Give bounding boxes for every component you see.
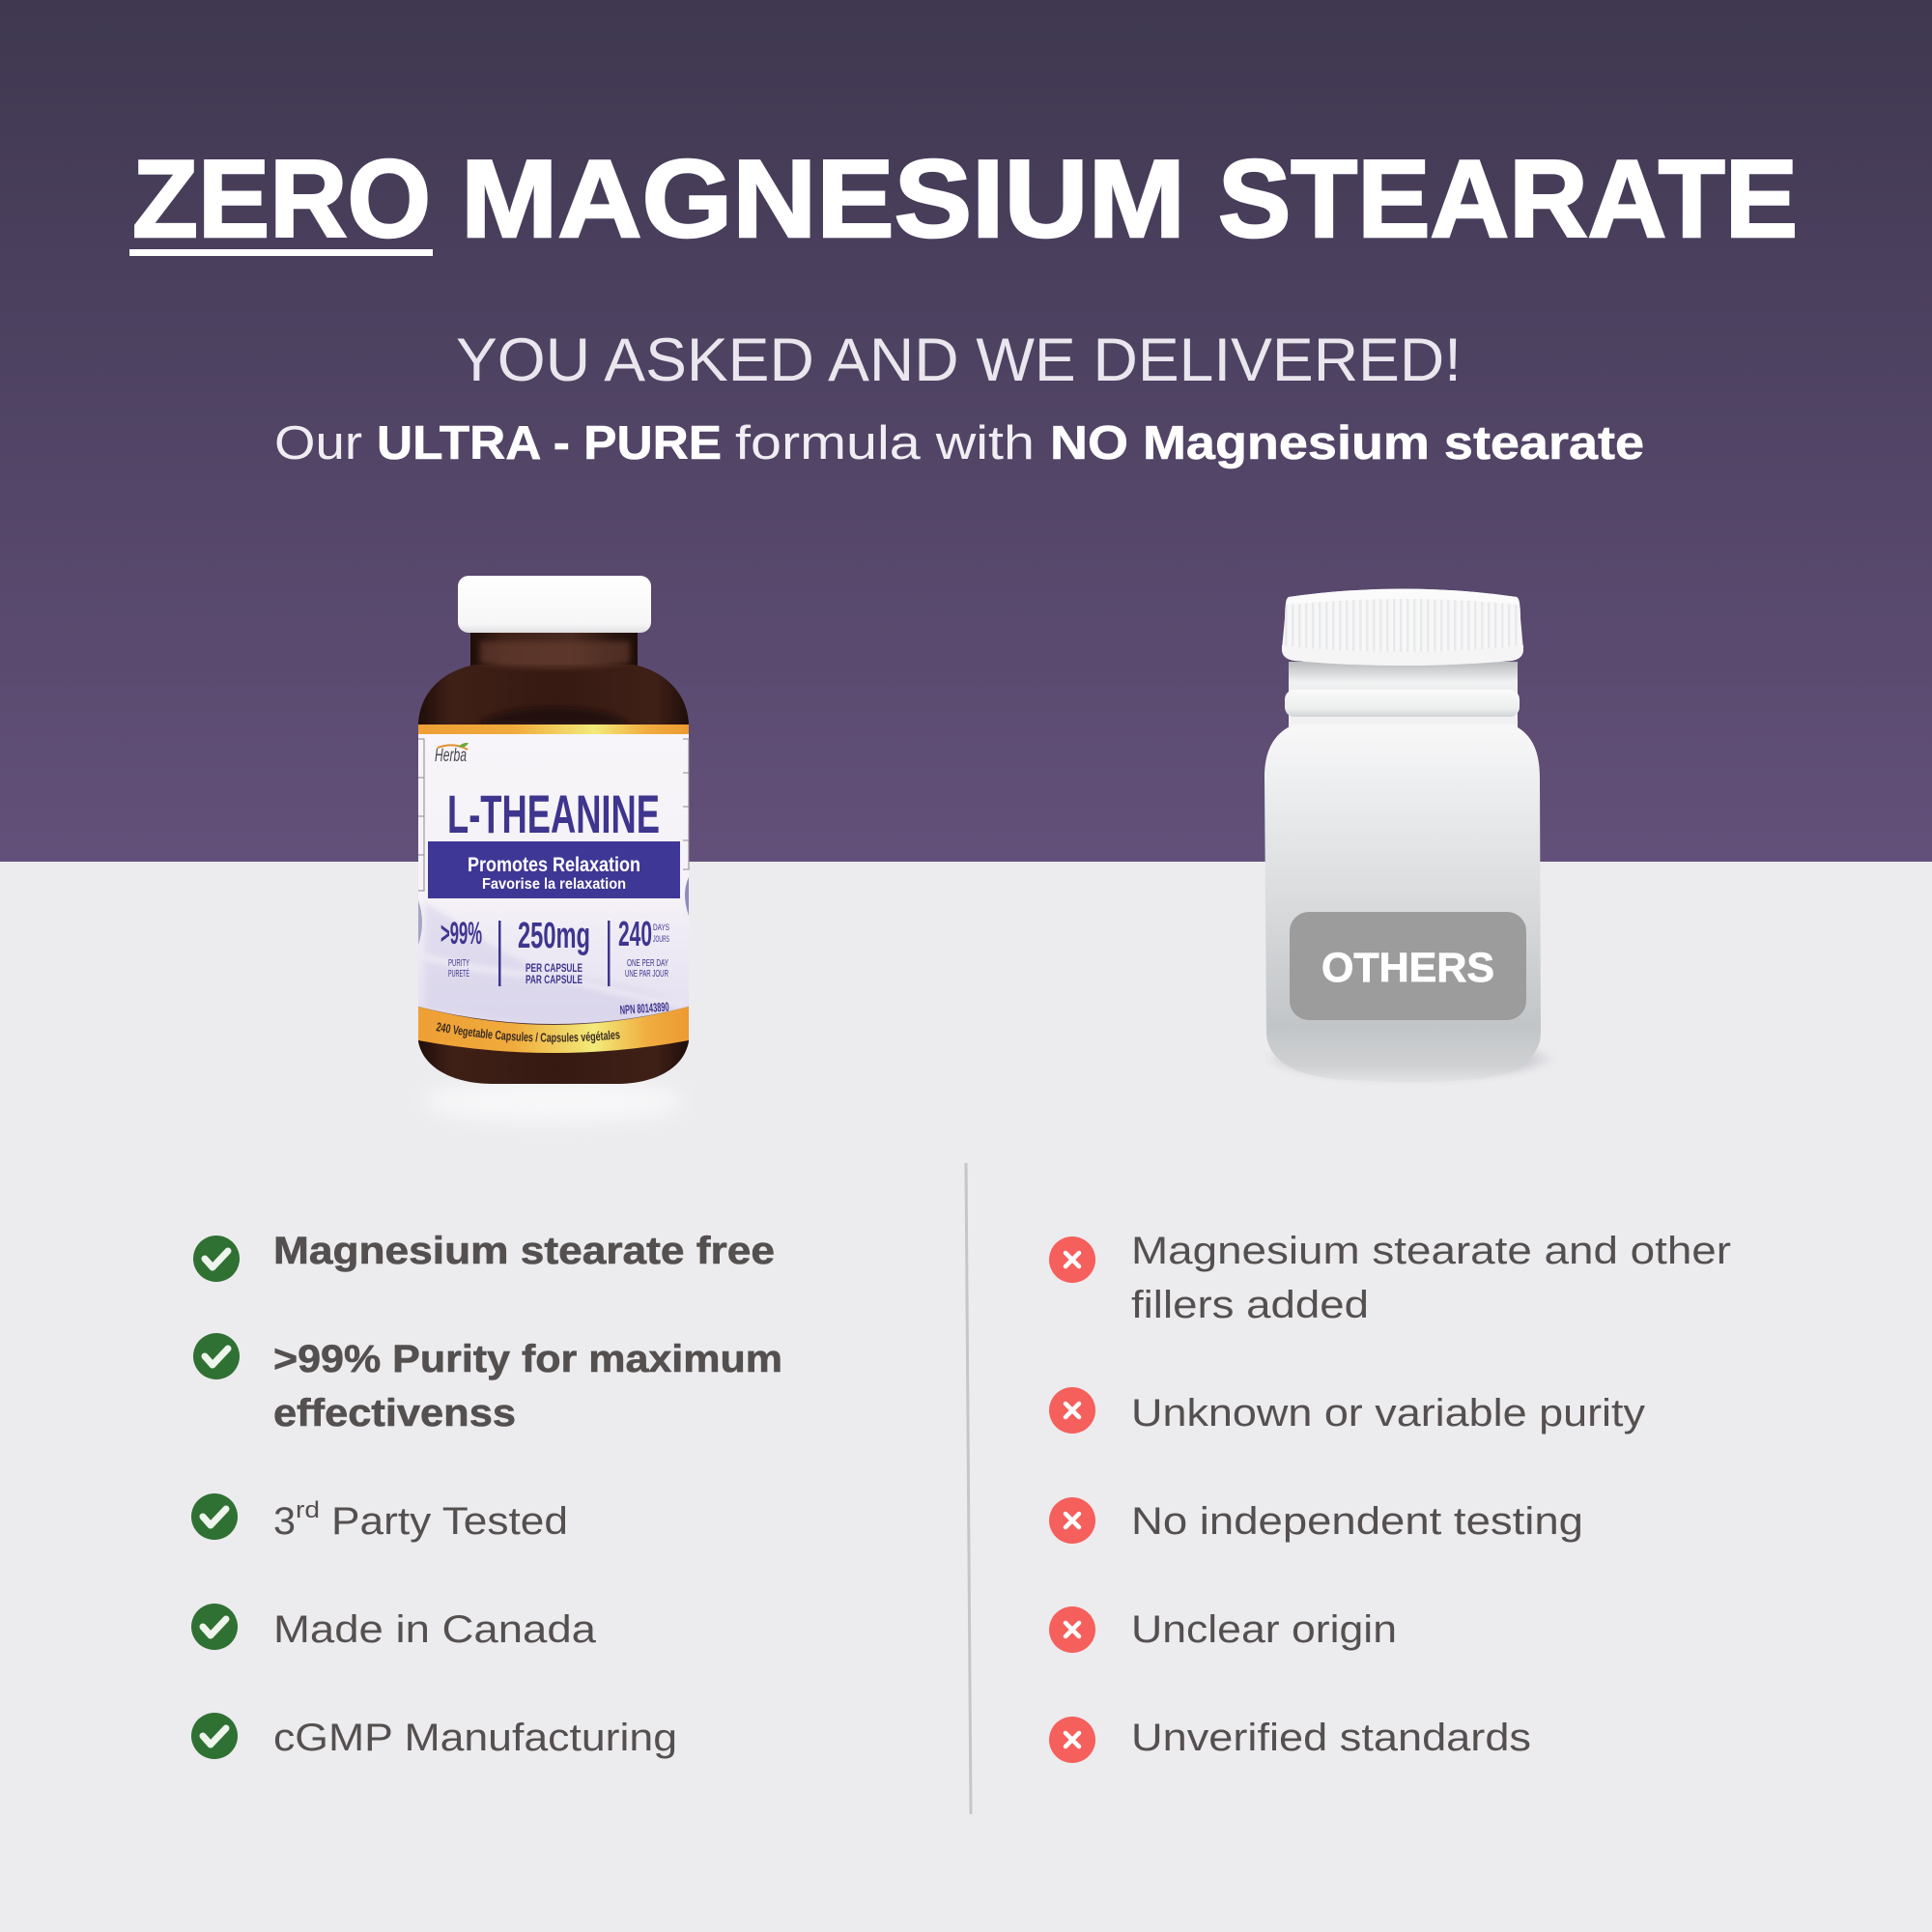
item: unknown purity: Unknown or variable purity — [1131, 1392, 1645, 1435]
bottle neck — [470, 626, 638, 674]
label gold bands — [418, 724, 689, 734]
cap — [458, 576, 651, 633]
tagline: Our — [274, 417, 362, 469]
stats: 240 — [618, 914, 652, 953]
bottle glass body — [418, 665, 689, 1084]
stats: JOURS — [653, 934, 669, 944]
stats: >99% — [440, 916, 482, 951]
item: made in Canada: Made in Canada — [273, 1608, 597, 1651]
label — [418, 724, 690, 1053]
item: unverified standards: Unverified standards — [1131, 1717, 1531, 1759]
claim banner: Promotes Relaxation — [468, 854, 640, 876]
item: no independent testing: No independent testing — [1131, 1500, 1583, 1543]
item: unclear origin — [1049, 1606, 1397, 1653]
OTHERS badge: OTHERS — [1321, 945, 1494, 991]
stats: UNE PAR JOUR — [625, 968, 668, 980]
item: fillers added — [1049, 1230, 1731, 1326]
product name: L-THEANINE — [447, 783, 660, 844]
item: magnesium stearate free: Magnesium stearate free — [273, 1230, 775, 1272]
background: light lower panel — [0, 862, 1932, 1932]
tagline: ULTRA - PURE — [377, 417, 722, 469]
stats: NPN 80143890 — [619, 999, 669, 1017]
product: L-Theanine bottle — [418, 576, 690, 1118]
bottle reflection — [423, 1080, 684, 1122]
stats: ONE PER DAY — [627, 957, 668, 969]
bottle shadow — [1265, 1036, 1555, 1082]
OTHERS badge — [1290, 912, 1526, 1020]
title: MAGNESIUM — [461, 138, 1185, 261]
claim banner: Favorise la relaxation — [482, 876, 626, 893]
item: no independent testing — [1049, 1497, 1583, 1544]
item: purity — [193, 1333, 782, 1435]
item: third party tested: rd — [296, 1497, 320, 1523]
item: fillers added: Magnesium stearate and other — [1131, 1230, 1731, 1272]
item: fillers added: fillers added — [1131, 1284, 1369, 1326]
list: benefits of Herba — [191, 1230, 782, 1759]
capsule count: 240 Vegetable Capsules / Capsules végétales — [436, 1022, 620, 1045]
cap — [1282, 589, 1523, 666]
tagline — [274, 417, 1644, 469]
stats: 250mg — [518, 916, 590, 956]
stats: DAYS — [653, 923, 669, 932]
item: unknown purity — [1049, 1387, 1645, 1435]
brand: Herba: Herba — [435, 746, 467, 766]
item: purity: effectivenss — [273, 1392, 516, 1435]
stats: PAR CAPSULE — [526, 973, 582, 986]
item: magnesium stearate free — [193, 1230, 775, 1282]
title: STEARATE — [1218, 138, 1798, 261]
item: made in Canada — [191, 1604, 597, 1651]
item: cGMP manufacturing: cGMP Manufacturing — [273, 1717, 677, 1759]
subtitle: YOU ASKED AND WE DELIVERED! — [456, 327, 1462, 394]
brand: Herba — [435, 743, 469, 766]
item: third party tested — [191, 1493, 568, 1543]
item: cGMP manufacturing — [191, 1713, 677, 1759]
claim banner — [428, 841, 680, 898]
item: third party tested: Party Tested — [331, 1500, 568, 1543]
product: others bottle — [1264, 589, 1555, 1082]
stats: PURITY — [448, 958, 469, 969]
side panels of label — [418, 739, 689, 891]
bottle body — [1264, 724, 1541, 1080]
background: purple header panel — [0, 0, 1932, 862]
list: drawbacks of others — [1049, 1230, 1731, 1763]
tagline: formula with — [735, 417, 1035, 469]
bottle neck — [1285, 662, 1520, 727]
title: ZERO — [132, 138, 431, 261]
item: unverified standards — [1049, 1717, 1531, 1763]
item: purity: >99% Purity for maximum — [273, 1338, 782, 1380]
item: unclear origin: Unclear origin — [1131, 1608, 1397, 1651]
tagline: NO Magnesium stearate — [1050, 417, 1644, 469]
stats: PURETÉ — [448, 967, 469, 980]
stats: PER CAPSULE — [526, 961, 582, 975]
title — [129, 138, 1798, 261]
item: third party tested: 3 — [273, 1500, 296, 1543]
stats — [440, 914, 669, 1017]
